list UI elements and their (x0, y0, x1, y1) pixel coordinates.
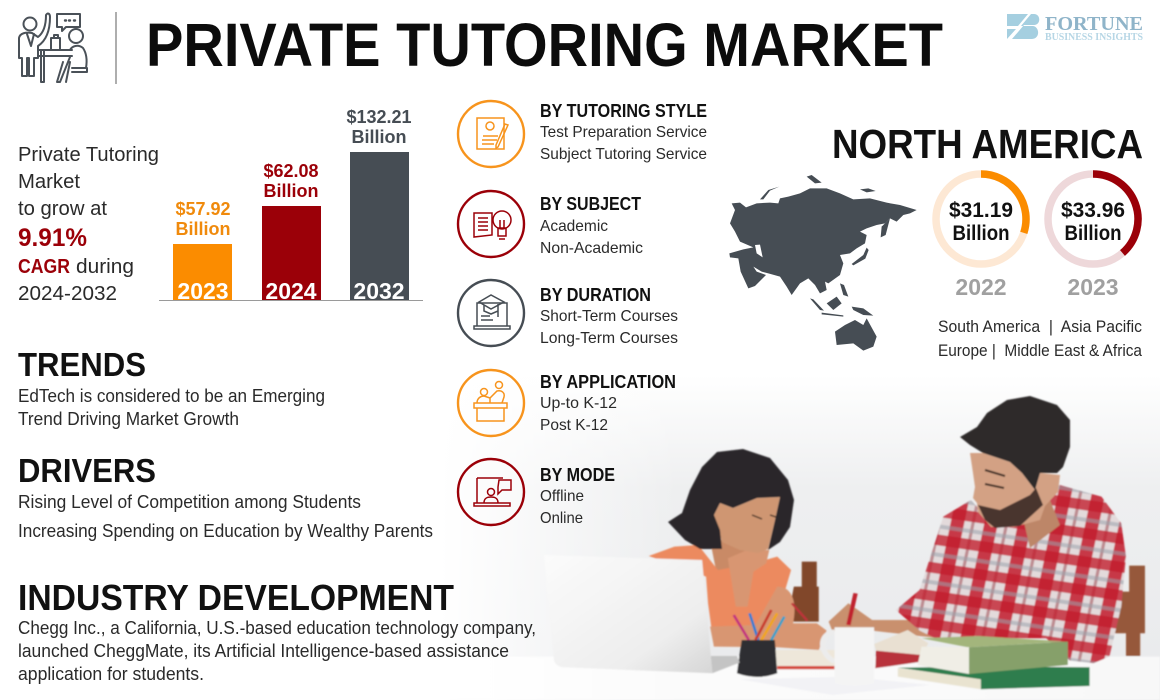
industry development: Chegg Inc., a California, U.S.-based education technology company, (18, 618, 536, 638)
bar 2024: Billion (264, 181, 318, 201)
donut: 2023: 2023 (1067, 274, 1119, 300)
segment: by subject: BY SUBJECT (540, 194, 641, 214)
girl neck (710, 540, 757, 570)
bar 2023: $57.92 (175, 199, 231, 219)
icon: book and light bulb (458, 191, 524, 257)
intro text: CAGR (18, 143, 159, 305)
intro text: CAGR: 2024-2032 (18, 282, 117, 305)
icon: teacher at desk (458, 370, 524, 436)
intro text: CAGR: Private Tutoring (18, 143, 159, 166)
header divider (115, 12, 117, 84)
other regions: Europe | Middle East & Africa (938, 342, 1143, 360)
industry development: INDUSTRY DEVELOPMENT (18, 577, 454, 618)
intro text: CAGR: to grow at (18, 197, 107, 220)
trends (18, 346, 325, 429)
intro text: CAGR: during (76, 255, 134, 278)
segment: by mode (458, 459, 615, 527)
segment: by mode: Offline (540, 488, 584, 505)
table (441, 657, 1160, 700)
segment: by subject: Academic (540, 218, 608, 235)
bar 2024: 2024 (265, 278, 317, 304)
other regions (938, 318, 1143, 360)
trends: Trend Driving Market Growth (18, 409, 239, 429)
segment: by duration: BY DURATION (540, 285, 651, 305)
mug (823, 627, 874, 686)
segment: by tutoring style: Test Preparation Service (540, 124, 707, 141)
pencil holder (737, 640, 777, 677)
intro text: CAGR: CAGR (18, 255, 70, 278)
intro text: CAGR: 9.91% (18, 224, 87, 252)
industry development (18, 577, 536, 684)
man forearm (829, 603, 939, 638)
paper (740, 677, 929, 695)
laptop (544, 555, 740, 673)
trends: EdTech is considered to be an Emerging (18, 386, 325, 406)
segment: by application: Post K-12 (540, 417, 608, 434)
donut: 2022: 2022 (955, 274, 1007, 300)
girl head (668, 449, 794, 553)
donut: 2022 (936, 174, 1026, 300)
header icon: tutor and student (19, 14, 87, 82)
red pen (848, 593, 856, 625)
bar 2023: Billion (176, 219, 230, 239)
man chair (1113, 566, 1145, 656)
bar 2023 (173, 199, 232, 304)
bar 2024 (262, 161, 321, 304)
donut: 2022: $31.19 (949, 199, 1013, 222)
industry development: launched CheggMate, its Artificial Intelligence-based assistance (18, 641, 509, 661)
segment: by duration (458, 280, 678, 347)
icon: document and pen (458, 101, 524, 167)
segment: by application (458, 370, 676, 436)
bar 2023: 2023 (177, 278, 229, 304)
logo: Fortune Business Insights: BUSINESS INSIGHTS (1045, 32, 1143, 43)
segment: by subject (458, 191, 643, 257)
donut: 2022: Billion (952, 222, 1010, 245)
pencil (792, 603, 807, 621)
man shirt (896, 483, 1126, 663)
icon: laptop and graduation cap (458, 280, 524, 346)
drivers: Increasing Spending on Education by Wealthy Parents (18, 521, 433, 541)
girl arm and hand (710, 550, 827, 650)
drivers (18, 452, 433, 541)
segment: by tutoring style: Subject Tutoring Service (540, 146, 707, 163)
girl body (649, 545, 791, 647)
photo background (440, 375, 1160, 700)
bar 2032: $132.21 (346, 107, 412, 127)
donut: 2023 (1048, 174, 1138, 300)
upper green book (918, 636, 1068, 674)
bar 2032: 2032 (353, 278, 405, 304)
segment: by duration: Long-Term Courses (540, 330, 678, 347)
title: PRIVATE TUTORING MARKET (146, 11, 943, 79)
bar 2032 (346, 107, 412, 304)
donut: 2023: $33.96 (1061, 199, 1125, 222)
map: Asia Pacific (729, 175, 917, 351)
logo: Fortune Business Insights: FORTUNE (1045, 13, 1143, 35)
bar 2024: $62.08 (263, 161, 319, 181)
girl's book (774, 650, 835, 669)
segment: by tutoring style (458, 101, 707, 167)
trends: TRENDS (18, 346, 146, 383)
donut: 2023: Billion (1064, 222, 1122, 245)
bar chart: market size (159, 107, 423, 304)
logo: Fortune Business Insights (1007, 13, 1143, 43)
segment: by application: BY APPLICATION (540, 372, 676, 392)
segment: by tutoring style: BY TUTORING STYLE (540, 101, 707, 121)
drivers: DRIVERS (18, 452, 156, 489)
segment: by mode: BY MODE (540, 465, 615, 485)
girl chair (787, 562, 819, 622)
open book (874, 630, 928, 668)
drivers: Rising Level of Competition among Students (18, 492, 361, 512)
segment: by mode: Online (540, 510, 583, 527)
pencils (734, 610, 784, 640)
lower green book (898, 667, 1090, 689)
segment: by duration: Short-Term Courses (540, 308, 678, 325)
intro text: CAGR: Market (18, 170, 80, 193)
segment: by subject: Non-Academic (540, 240, 643, 257)
photo: tutor and student at table (441, 396, 1160, 700)
bar 2032: Billion (352, 127, 406, 147)
segment: by application: Up-to K-12 (540, 395, 617, 412)
man head (960, 396, 1070, 548)
industry development: application for students. (18, 664, 204, 684)
other regions: South America | Asia Pacific (938, 318, 1142, 336)
icon: online class on laptop (458, 459, 524, 525)
